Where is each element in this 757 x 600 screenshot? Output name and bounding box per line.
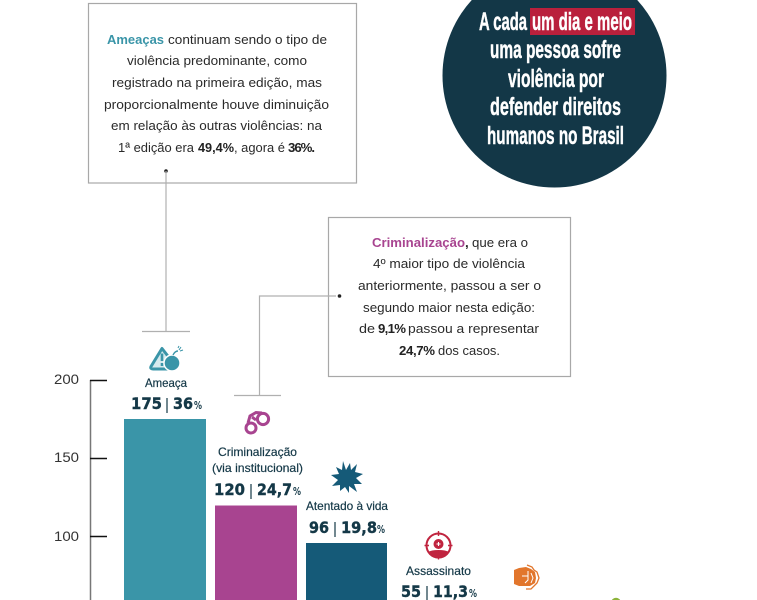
chart axis: [54, 371, 107, 600]
annotation box: criminalização: que era o: [472, 235, 528, 250]
annotation box: ameaças: 36%.: [288, 140, 315, 155]
label: criminalização: [212, 445, 303, 499]
icon: warning triangle and bomb: [151, 346, 183, 371]
bar: atentado à vida: [306, 543, 387, 600]
chart axis: 150: [54, 449, 79, 465]
label: ameaça: Ameaça: [145, 376, 187, 390]
label: atentado à vida: 19,8: [341, 518, 377, 537]
annotation box: criminalização: [328, 218, 570, 376]
label: assassinato: Assassinato: [406, 564, 471, 578]
label: ameaça: 175: [131, 394, 162, 413]
label: criminalização: %: [293, 486, 301, 498]
chart axis: 200: [54, 371, 79, 387]
label: ameaça: %: [194, 400, 202, 412]
annotation box: criminalização: 24,7%: [399, 343, 435, 358]
callout circle: um dia e meio: humanos no Brasil: [487, 122, 624, 150]
callout circle: um dia e meio: violência por: [508, 65, 604, 93]
label: atentado à vida: [306, 499, 388, 537]
label: atentado à vida: %: [377, 524, 385, 536]
icon: target: [424, 531, 452, 560]
annotation box: ameaças: proporcionalmente houve diminuição: [104, 97, 329, 112]
label: assassinato: %: [469, 588, 477, 600]
label: assassinato: [401, 564, 477, 600]
annotation box: ameaças: em relação às outras violências: na: [111, 118, 323, 133]
label: criminalização: Criminalização: [218, 445, 297, 459]
connector: criminalização box to bar: [234, 294, 341, 396]
icon: explosion star: [331, 461, 363, 493]
annotation box: criminalização: 9,1%: [378, 321, 406, 336]
callout circle: um dia e meio: um dia e meio: [532, 8, 632, 36]
label: atentado à vida: Atentado à vida: [306, 499, 388, 513]
callout circle: um dia e meio: uma pessoa sofre: [490, 36, 621, 64]
chart axis: 100: [54, 528, 79, 544]
label: ameaça: [131, 376, 202, 413]
annotation box: criminalização: de: [359, 321, 375, 336]
icon: handcuffs: [246, 412, 269, 433]
annotation box: ameaças: [88, 4, 356, 183]
label: criminalização: 120: [214, 480, 245, 499]
connector: ameaças box to bar: [142, 169, 190, 332]
annotation box: criminalização: dos casos.: [438, 343, 500, 358]
annotation box: criminalização: segundo maior nesta edição:: [363, 300, 535, 315]
annotation box: criminalização: 4º maior tipo de violência: [373, 256, 526, 271]
annotation box: ameaças: 1ª edição era: [118, 140, 195, 155]
label: criminalização: 24,7: [257, 480, 292, 499]
icon: fist: [514, 565, 539, 589]
label: atentado à vida: 96: [309, 518, 329, 537]
icon: green shape cut off at edge: [611, 598, 621, 600]
callout circle: um dia e meio: A cada: [479, 8, 528, 36]
annotation box: ameaças: registrado na primeira edição, mas: [112, 75, 322, 90]
callout circle: um dia e meio: defender direitos: [490, 93, 621, 121]
annotation box: criminalização: Criminalização: [372, 235, 465, 250]
bar: ameaça: [124, 419, 206, 600]
annotation box: ameaças: continuam sendo o tipo de: [168, 32, 327, 47]
label: ameaça: 36: [173, 394, 193, 413]
annotation box: ameaças: 49,4%: [198, 140, 234, 155]
bar: criminalização: [215, 506, 297, 600]
annotation box: criminalização: anteriormente, passou a ser o: [358, 278, 541, 293]
annotation box: ameaças: Ameaças: [107, 32, 164, 47]
label: criminalização: (via institucional): [212, 461, 303, 475]
callout circle: um dia e meio: [442, 0, 666, 188]
annotation box: ameaças: violência predominante, como: [127, 53, 307, 68]
annotation box: criminalização: ,: [465, 235, 469, 250]
annotation box: ameaças: , agora é: [234, 140, 285, 155]
annotation box: criminalização: passou a representar: [408, 321, 540, 336]
